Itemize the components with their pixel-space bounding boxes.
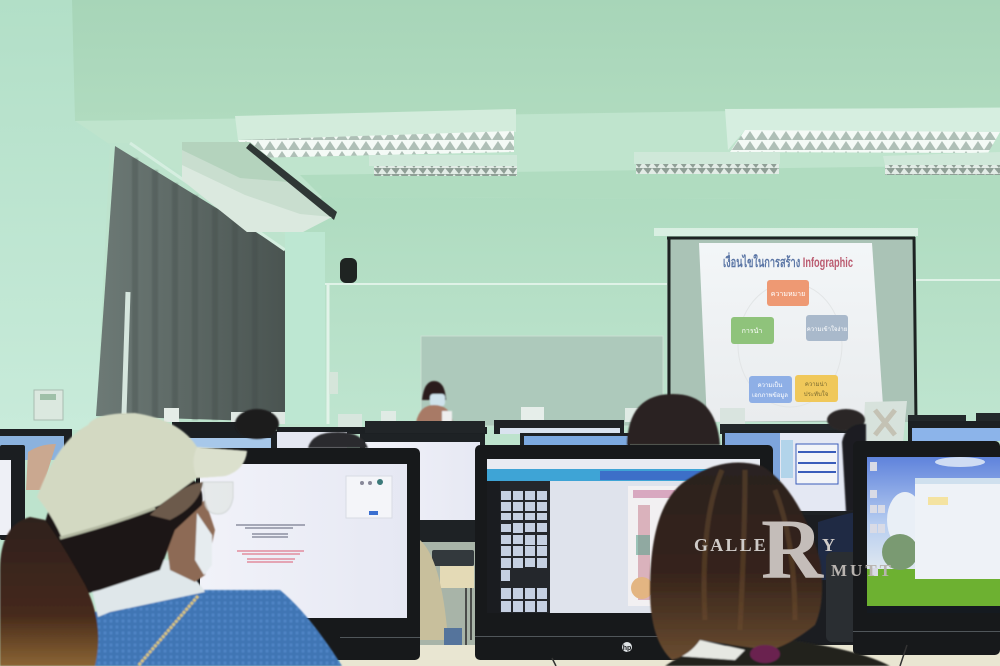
slide box: yellow: ประทับใจ (804, 390, 828, 398)
curtain (96, 143, 285, 422)
whiteboard (421, 336, 663, 426)
projector screen housing (654, 228, 918, 236)
projection screen with slide (667, 237, 916, 422)
middle monitor behind first student (360, 434, 485, 648)
HP logo (622, 642, 632, 652)
face and neck (165, 500, 215, 582)
front monitor: windows desktop (853, 441, 1000, 655)
watermark: Gallery RMUTT: MUTT (831, 561, 894, 580)
dark top (665, 640, 890, 666)
collar (92, 560, 205, 617)
slide box: green: การนำ (742, 327, 762, 335)
watermark: Gallery RMUTT: Y (822, 535, 835, 555)
slide box: orange (767, 280, 809, 306)
slide box: blue (749, 376, 792, 403)
face mask (195, 513, 212, 575)
ceiling light: front left (235, 109, 516, 158)
HP logo: hp (623, 645, 631, 652)
slide box: grey blue (806, 315, 848, 341)
wall socket (329, 372, 338, 394)
slide box: grey blue: ความเข้าใจง่าย (807, 325, 847, 333)
screen text lines (236, 525, 305, 562)
watermark: Gallery RMUTT: R (761, 501, 824, 597)
ceiling soffit (75, 107, 1000, 235)
instructor at podium (416, 381, 453, 422)
middle right monitor (722, 430, 860, 647)
ceiling light: front right (725, 108, 1000, 153)
ceiling (72, 0, 1000, 121)
slide title: เงื่อนไขในการสร้าง Infographic (723, 252, 853, 270)
speaker (340, 258, 357, 283)
left wall (0, 0, 110, 430)
ponytail (0, 517, 98, 666)
desk (340, 645, 1000, 666)
wall trim (325, 280, 1000, 284)
slide box: orange: ความหมาย (771, 291, 805, 298)
left edge monitor (0, 445, 25, 540)
slide box: green (731, 317, 774, 344)
student with brown hair (foreground right) (650, 462, 890, 666)
rear monitor row (0, 413, 1000, 460)
slide box: yellow: ความน่า (805, 381, 827, 388)
pillar (285, 232, 325, 424)
back wall (300, 190, 1000, 430)
front monitor: canva editor (475, 445, 773, 660)
sweater (0, 590, 342, 666)
wall thermostat (34, 390, 63, 420)
desk cables (552, 645, 907, 666)
slide box: yellow (795, 375, 838, 402)
paper signs on desks (164, 401, 907, 442)
ceiling light: rear centre (369, 155, 517, 176)
area below mid monitors (420, 520, 476, 648)
rear heads (235, 394, 866, 512)
watermark: Gallery RMUTT: GALLE (694, 535, 768, 555)
ceiling light: rear far right (883, 152, 1000, 175)
slide box: blue: เอกภาพข้อมูล (752, 392, 788, 399)
baseball cap (37, 413, 247, 538)
shape grid (501, 491, 547, 612)
necklace chain (138, 596, 198, 666)
dark hair (40, 478, 202, 600)
front monitor: left (196, 448, 420, 660)
striped student in background (26, 444, 56, 490)
slide box: blue: ความเป็น (758, 380, 782, 389)
student with cap (foreground left) (0, 413, 342, 666)
hair (650, 462, 822, 660)
ceiling light: rear right (634, 152, 780, 174)
glasses (203, 482, 233, 514)
dialog on screen (346, 476, 392, 518)
hair tie (750, 645, 780, 663)
watermark: Gallery RMUTT (694, 501, 894, 597)
air conditioner (182, 142, 337, 232)
